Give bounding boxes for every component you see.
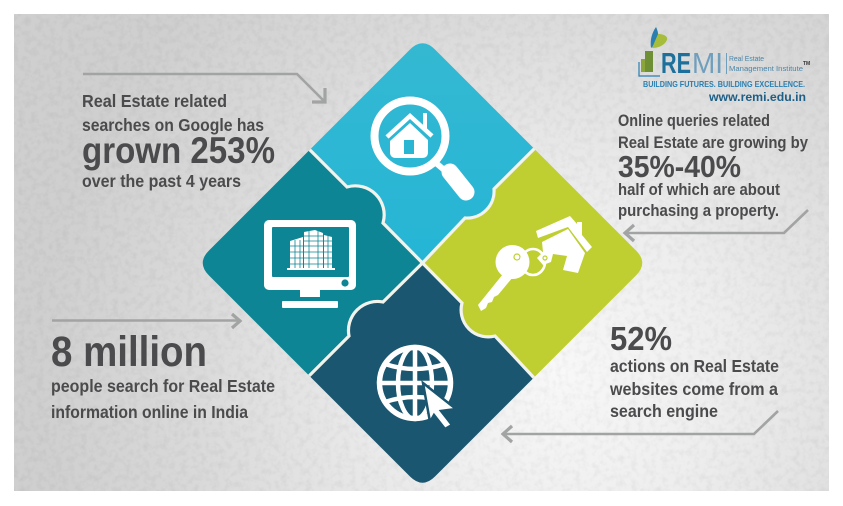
- panel: green keys piece: [422, 147, 655, 380]
- text block: online queries: [618, 111, 808, 220]
- arrow: to search piece: [83, 74, 325, 102]
- logo institute name: Management Institute: [729, 64, 803, 73]
- logo wordmark: RE: [661, 48, 691, 80]
- icon: computer monitor with buildings: [264, 220, 356, 308]
- icon: butterfly: [651, 27, 667, 48]
- logo: REMI: [639, 27, 810, 104]
- logo institute name: Real Estate: [729, 54, 764, 63]
- icon: globe with cursor: [379, 347, 456, 429]
- text block: online queries: Online queries related: [618, 111, 770, 130]
- logo institute name: [729, 54, 810, 73]
- panel: teal computer piece: [190, 148, 422, 377]
- text block: Google searches: grown 253%: [82, 130, 275, 171]
- logo wordmark: MI: [692, 48, 723, 80]
- text block: online queries: Real Estate are growing by: [618, 133, 808, 152]
- puzzle diamond: [202, 43, 642, 483]
- logo tagline: BUILDING FUTURES. BUILDING EXCELLENCE.: [643, 79, 805, 89]
- icon: magnifying glass over house: [374, 100, 466, 192]
- text block: Google searches: Real Estate related: [82, 91, 227, 111]
- text block: 8 million: information online in India: [51, 402, 248, 422]
- panel: blue search piece: [308, 30, 536, 263]
- text block: 52 percent: 52%: [610, 320, 672, 357]
- arrow: to computer piece: [52, 314, 240, 328]
- text block: 52 percent: search engine: [610, 401, 718, 421]
- text block: 52 percent: websites come from a: [609, 379, 778, 399]
- icon: buildings: [639, 51, 660, 76]
- text block: Google searches: [82, 91, 275, 191]
- text block: 52 percent: actions on Real Estate: [610, 356, 779, 376]
- text block: 8 million: people search for Real Estate: [51, 376, 275, 396]
- arrow: to keys piece: [625, 210, 808, 241]
- text block: 8 million: [51, 328, 275, 422]
- text block: online queries: half of which are about: [618, 180, 780, 199]
- piece separators: [308, 147, 536, 380]
- text block: online queries: purchasing a property.: [618, 201, 779, 220]
- text block: Google searches: over the past 4 years: [82, 171, 241, 191]
- panel: navy web piece: [308, 263, 536, 495]
- logo institute name: TM: [803, 61, 810, 67]
- icon: key with house keyring: [478, 216, 592, 311]
- website url: www.remi.edu.in: [708, 90, 806, 104]
- text block: Google searches: searches on Google has: [82, 115, 264, 135]
- text block: online queries: 35%-40%: [618, 149, 741, 184]
- logo wordmark: [661, 48, 723, 80]
- text block: 8 million: 8 million: [51, 328, 207, 376]
- text block: 52 percent: [609, 320, 779, 421]
- arrow: to web piece: [503, 411, 778, 442]
